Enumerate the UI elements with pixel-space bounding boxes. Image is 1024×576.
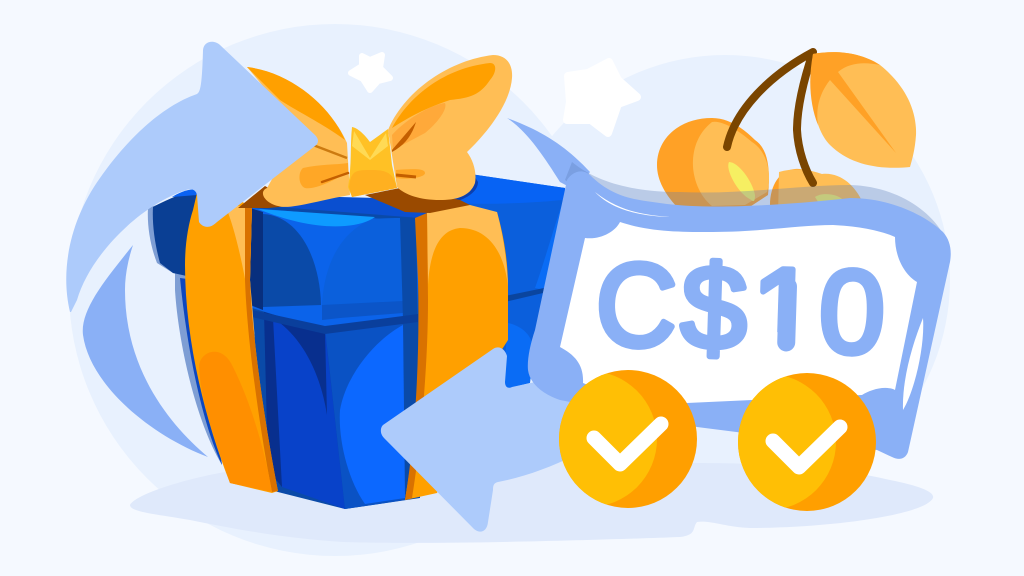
cherry stems bbox=[727, 52, 813, 183]
lid top surface bbox=[240, 195, 450, 222]
ticket bbox=[528, 171, 951, 459]
amount bbox=[594, 238, 887, 379]
amount: $10 bbox=[679, 241, 887, 379]
coin: left check bbox=[559, 370, 697, 508]
amount: C bbox=[594, 239, 679, 373]
gift box bbox=[148, 55, 565, 509]
box right side bbox=[440, 174, 565, 388]
bow knot bbox=[348, 127, 397, 197]
ticket translucent band bbox=[565, 162, 942, 232]
arrow: bottom curved bbox=[381, 347, 600, 532]
ground shadow bbox=[130, 461, 933, 543]
ribbon: right strap bbox=[405, 205, 508, 500]
arrow tail: back swoosh bbox=[83, 245, 208, 457]
illustration: gift box and C$10 bonus bbox=[66, 24, 951, 556]
ribbon: left strap bbox=[185, 180, 278, 493]
cherry: left bbox=[657, 118, 769, 210]
cherries bbox=[657, 52, 916, 215]
star: small bbox=[351, 55, 390, 90]
ticket border bbox=[528, 171, 951, 459]
ticket highlight top bbox=[595, 192, 670, 217]
arrow: top curved bbox=[66, 42, 318, 312]
ticket face bbox=[560, 222, 917, 403]
background circles bbox=[69, 24, 950, 556]
box left side bbox=[148, 189, 222, 465]
star: large bbox=[567, 62, 637, 133]
bow shadow bbox=[238, 186, 470, 213]
coin: right check bbox=[738, 373, 876, 511]
bow: left loop bbox=[247, 67, 350, 207]
cherry: right bbox=[770, 169, 863, 215]
ticket highlight right bbox=[903, 318, 923, 410]
cherry leaf bbox=[810, 52, 916, 168]
ticket tail tip bbox=[507, 118, 590, 190]
box front body bbox=[240, 195, 450, 509]
bow: right loop bbox=[388, 55, 512, 200]
